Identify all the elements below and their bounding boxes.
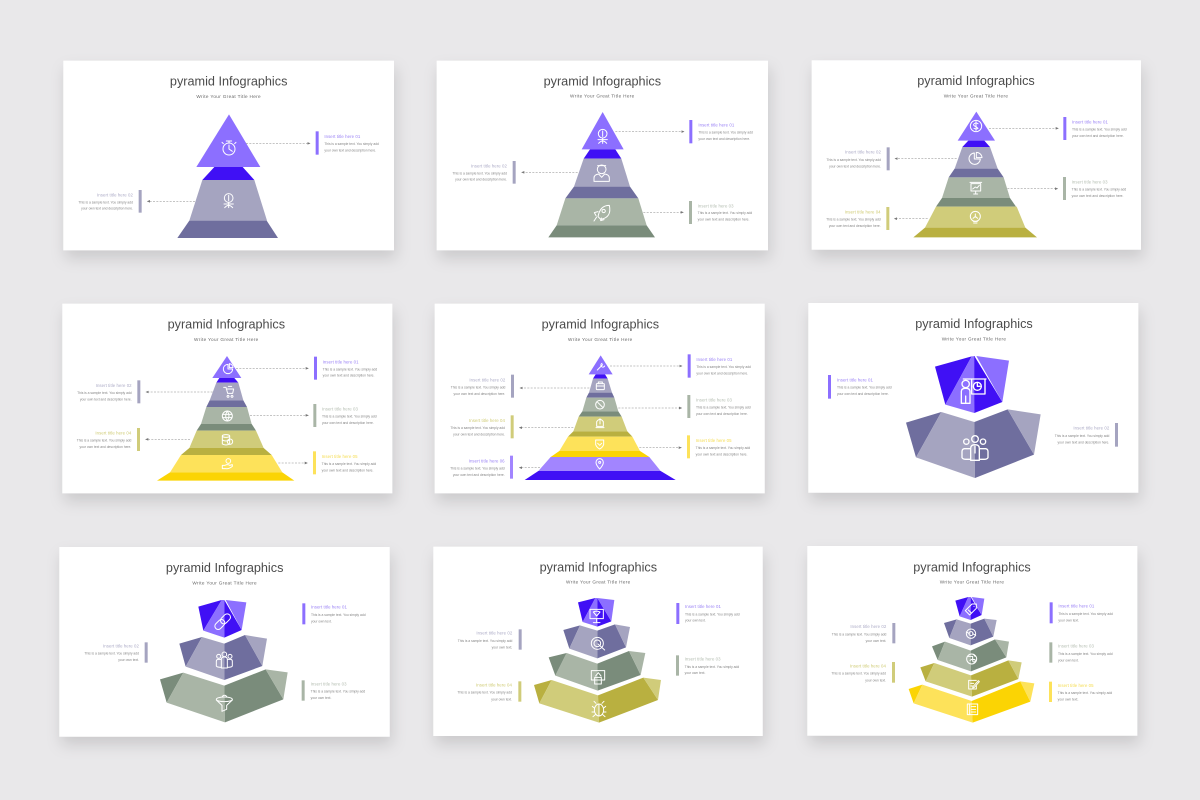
callout 03: This is a sample text. You simply add [696,406,751,410]
callout 01: Insert title here 01 [837,377,874,382]
panel: two-level 3D pyramid [808,303,1138,493]
callout 02: Insert title here 02 [850,624,887,629]
tier 6 [525,457,676,480]
callout 04: Insert title here 04 [95,431,132,436]
icon: light bulb [970,211,980,223]
title: pyramid Infographics [915,317,1033,331]
callout 06 [450,456,540,479]
callout 03 [643,201,752,224]
callout 04 [450,415,573,438]
callout 02 [452,161,578,184]
callout 02: your own text. [492,645,512,649]
icon: note and pen [969,680,979,689]
tier 5 [157,455,294,481]
callout 02: Insert title here 02 [471,163,508,168]
callout 01: your own text. [685,619,706,623]
subtitle: Write Your Great Title Here [942,336,1006,341]
callout 02: your own text and description here. [829,164,881,168]
callout 01: This is a sample text. You simply add [324,142,379,146]
callout 05 [278,451,376,474]
tier 4 [920,660,1022,697]
callout 03: Insert title here 03 [311,681,347,686]
callout 05: This is a sample text. You simply add [1058,691,1112,695]
callout 02: This is a sample text. You simply add [832,633,886,637]
callout 01 [615,120,753,143]
callout 03 [1007,177,1126,200]
tier 3 [932,639,1009,671]
callout 02: your own text and description here. [455,178,507,182]
callout 01: your own text. [311,619,332,623]
title: pyramid Infographics [168,318,285,332]
tier 2 [949,147,1004,177]
callout 01: your own text and description here. [1072,134,1124,138]
tier 2 [563,624,630,658]
icon: tag [965,604,976,615]
panel: six-level pyramid [435,304,765,493]
callout 01: your own text and description here. [324,148,376,152]
title: pyramid Infographics [917,74,1035,88]
callout 05 [1049,682,1112,702]
tier 4 [534,678,661,723]
callout 04 [826,207,928,230]
icon: pie chart [223,364,233,374]
callout 03: This is a sample text. You simply add [311,690,365,694]
callout 04: Insert title here 04 [850,663,887,668]
icon: compass [596,400,604,409]
callout 02 [1055,423,1118,447]
callout 02: This is a sample text. You simply add [451,386,505,390]
subtitle: Write Your Great Title Here [196,94,261,99]
callout 01: Insert title here 01 [323,359,359,364]
callout 01: This is a sample text. You simply add [1058,612,1113,616]
callout 04: Insert title here 04 [845,209,881,214]
callout 02: Insert title here 02 [845,150,882,155]
icon: presentation board [970,182,982,194]
tier 3 [579,398,622,417]
callout 01: your own text. [1058,618,1079,622]
callout 04: This is a sample text. You simply add [457,691,512,695]
callout 05: your own text and description here. [322,468,374,472]
icon: pie chart [969,152,982,164]
callout 03 [676,655,739,676]
callout 02: your own text and description here. [81,207,133,211]
3D pyramid [909,597,1034,723]
callout 01 [1050,602,1113,623]
callout 01: Insert title here 01 [311,605,348,610]
callout 01 [246,131,379,155]
callout 03: Insert title here 03 [685,656,721,661]
callout 01 [302,603,366,624]
icon: stopwatch [222,141,236,155]
callout 01: Insert title here 01 [696,357,733,362]
callout 02 [458,629,522,650]
tier 1 [582,112,624,159]
title: pyramid Infographics [913,560,1031,574]
callout 04: This is a sample text. You simply add [826,218,881,222]
title: pyramid Infographics [170,75,287,89]
callout 02: This is a sample text. You simply add [77,391,132,395]
callout 03: Insert title here 03 [1058,643,1095,648]
panel: five-level 3D pyramid [807,546,1137,736]
callout 01: This is a sample text. You simply add [1072,128,1127,132]
callout 01: Insert title here 01 [685,604,722,609]
callout 03: your own text. [1058,658,1079,662]
callout 03: your own text and description here. [322,421,374,425]
icon: monitor [590,609,603,623]
callout 04: Insert title here 04 [469,418,506,423]
title: pyramid Infographics [542,318,659,332]
card background [433,547,763,736]
callout 05: your own text and description here. [696,452,748,456]
callout 03: Insert title here 03 [698,203,734,208]
icon: hand with coin [222,459,232,469]
callout 02: Insert title here 02 [97,192,134,197]
icon: bug [592,701,606,717]
callout 03: This is a sample text. You simply add [685,665,739,669]
icon: rocket [594,205,610,221]
callout 02: your own text and description here. [1058,440,1109,444]
icon: shield [596,440,604,449]
tier 3 [197,407,256,431]
callout 01: Insert title here 01 [698,123,735,128]
panel: two-level pyramid [63,61,394,250]
tier 3 [160,669,288,722]
callout 03: Insert title here 03 [696,398,733,403]
panel: four-level pyramid [812,60,1141,250]
callout 02: This is a sample text. You simply add [1055,434,1109,438]
tier 1 [958,112,995,147]
icon: chain link [213,612,232,631]
tier 2 [944,619,997,645]
callout 02 [451,375,589,398]
tier 2 [177,180,278,238]
icon: coin [598,129,607,143]
callout 01: This is a sample text. You simply add [323,367,377,371]
callout 01: your own text and description here. [837,392,889,396]
callout 02 [826,147,957,170]
callout 01: This is a sample text. You simply add [837,386,892,390]
callout 04: This is a sample text. You simply add [831,672,886,676]
icon: map pin [596,459,603,469]
tier 1 [955,597,984,620]
icon: globe [222,411,232,421]
callout 03: your own text and description here. [696,412,748,416]
callout 01 [610,354,751,378]
tier 4 [913,207,1037,237]
3D pyramid [534,598,661,723]
callout 02: your own text and description here. [80,397,132,401]
callout 06: This is a sample text. You simply add [450,467,505,471]
icon: team [962,436,988,460]
tier 3 [548,198,655,237]
callout 04 [831,662,895,683]
icon: dollar [970,120,982,132]
callout 03: This is a sample text. You simply add [322,415,377,419]
panel: five-level pyramid [62,304,392,493]
subtitle: Write Your Great Title Here [570,94,635,99]
callout 03 [1049,642,1113,663]
callout 04: your own text and description here. [80,445,131,449]
callout 05: your own text. [1058,698,1078,702]
tier 3 [549,651,645,691]
pyramid [177,114,278,238]
callout 02 [77,380,213,403]
tier 3 [936,177,1016,207]
callout 02: Insert title here 02 [1073,426,1110,431]
subtitle: Write Your Great Title Here [192,580,257,585]
tier 2 [906,409,1041,478]
callout 04: Insert title here 04 [476,683,513,688]
callout 04: your own text. [865,678,886,682]
callout 01: your own text and description here. [696,371,748,375]
callout 02: your own text. [866,639,886,643]
callout 01 [236,357,377,380]
callout 05: Insert title here 05 [322,454,358,459]
pyramid [157,356,294,481]
callout 04: your own text and description here. [453,433,505,437]
callout 01: your own text and description here. [698,137,750,141]
callout 01: Insert title here 01 [1072,119,1109,124]
subtitle: Write Your Great Title Here [566,580,631,585]
callout 02: This is a sample text. You simply add [826,158,881,162]
card background [63,61,394,250]
callout 01 [989,117,1127,140]
tier 4 [568,417,632,437]
callout 04: your own text and description here. [829,224,881,228]
callout 02: This is a sample text. You simply add [458,639,512,643]
callout 03: your own text. [311,696,331,700]
title: pyramid Infographics [166,561,283,575]
icon: team [216,652,232,668]
card background [435,304,765,493]
callout 05: This is a sample text. You simply add [322,462,376,466]
callout 02: your own text. [118,658,139,662]
callout 04: This is a sample text. You simply add [77,439,131,443]
tier 1 [198,600,246,638]
icon: board [591,671,605,684]
icon: funnel [216,695,232,711]
icon: tool [597,363,605,370]
card background [808,303,1138,493]
subtitle: Write Your Great Title Here [568,337,633,342]
icon: presenter [961,379,986,403]
tier 1 [212,356,241,383]
icon: hand [596,419,604,428]
callout 02: This is a sample text. You simply add [78,200,133,204]
icon: target circle [966,629,976,638]
panel: three-level 3D pyramid [59,547,390,737]
tier 1 [589,355,613,379]
subtitle: Write Your Great Title Here [940,579,1004,584]
callout 01: This is a sample text. You simply add [698,131,753,135]
callout 03: This is a sample text. You simply add [1058,652,1113,656]
icon: globe with gear [967,654,977,664]
callout 02: Insert title here 02 [103,643,140,648]
tier 4 [181,431,272,455]
pyramid [913,112,1037,237]
callout 03: your own text. [685,671,705,675]
panel: three-level pyramid [437,61,768,250]
card background [437,61,768,250]
subtitle: Write Your Great Title Here [194,337,259,342]
callout 03 [618,395,751,418]
tier 2 [206,383,247,407]
callout 03: your own text and description here. [698,218,750,222]
callout 05 [639,435,750,458]
icon: database [222,435,233,445]
tier 5 [551,437,649,457]
title: pyramid Infographics [540,561,657,575]
callout 03: Insert title here 03 [322,407,359,412]
card background [807,546,1137,736]
callout 05: Insert title here 05 [696,438,732,443]
callout 03 [302,680,365,701]
callout 03: Insert title here 03 [1072,179,1108,184]
callout 01: Insert title here 01 [324,134,361,139]
tier 5 [909,681,1034,723]
tier 2 [179,635,267,680]
icon: person [594,165,609,181]
callout 02 [832,623,895,643]
callout 02 [84,642,148,663]
callout 04 [457,681,521,702]
tier 1 [196,114,260,180]
icon: document [967,704,978,715]
card background [59,547,390,737]
callout 02: This is a sample text. You simply add [84,652,139,656]
card background [62,304,392,493]
callout 01 [676,603,740,624]
callout 02: your own text and description here. [454,392,505,396]
callout 02: Insert title here 02 [476,630,513,635]
callout 04: your own text. [491,697,512,701]
tier 1 [578,598,614,627]
callout 03: This is a sample text. You simply add [698,211,752,215]
callout 01: This is a sample text. You simply add [696,365,751,369]
callout 06: Insert title here 06 [469,459,505,464]
callout 01: This is a sample text. You simply add [685,612,740,616]
title: pyramid Infographics [544,74,661,88]
pyramid [525,355,676,480]
3D pyramid [906,356,1041,478]
callout 01: This is a sample text. You simply add [311,613,366,617]
3D pyramid [160,600,288,722]
callout 02: Insert title here 02 [469,378,506,383]
callout 06: your own text and description here. [453,473,505,477]
tier 2 [565,159,638,198]
icon: coin [224,194,233,208]
panel: four-level 3D pyramid [433,547,763,736]
icon: briefcase [596,382,604,390]
callout 04 [77,428,190,451]
callout 05: Insert title here 05 [1058,683,1094,688]
callout 03: This is a sample text. You simply add [1072,187,1126,191]
callout 03: your own text and description here. [1072,194,1124,198]
icon: shopping cart [224,386,234,397]
callout 01: your own text and description here. [323,373,375,377]
pyramid [548,112,655,237]
callout 02 [78,190,195,213]
tier 2 [586,379,614,398]
callout 02: This is a sample text. You simply add [452,171,507,175]
callout 03 [250,404,377,427]
icon: target [591,637,605,650]
callout 01: Insert title here 01 [1058,604,1095,609]
callout 05: This is a sample text. You simply add [696,446,750,450]
tier 1 [935,356,1009,413]
subtitle: Write Your Great Title Here [944,93,1008,98]
callout 02: Insert title here 02 [96,383,132,388]
card background [812,60,1141,250]
callout 04: This is a sample text. You simply add [450,426,505,430]
callout 01 [828,375,892,399]
